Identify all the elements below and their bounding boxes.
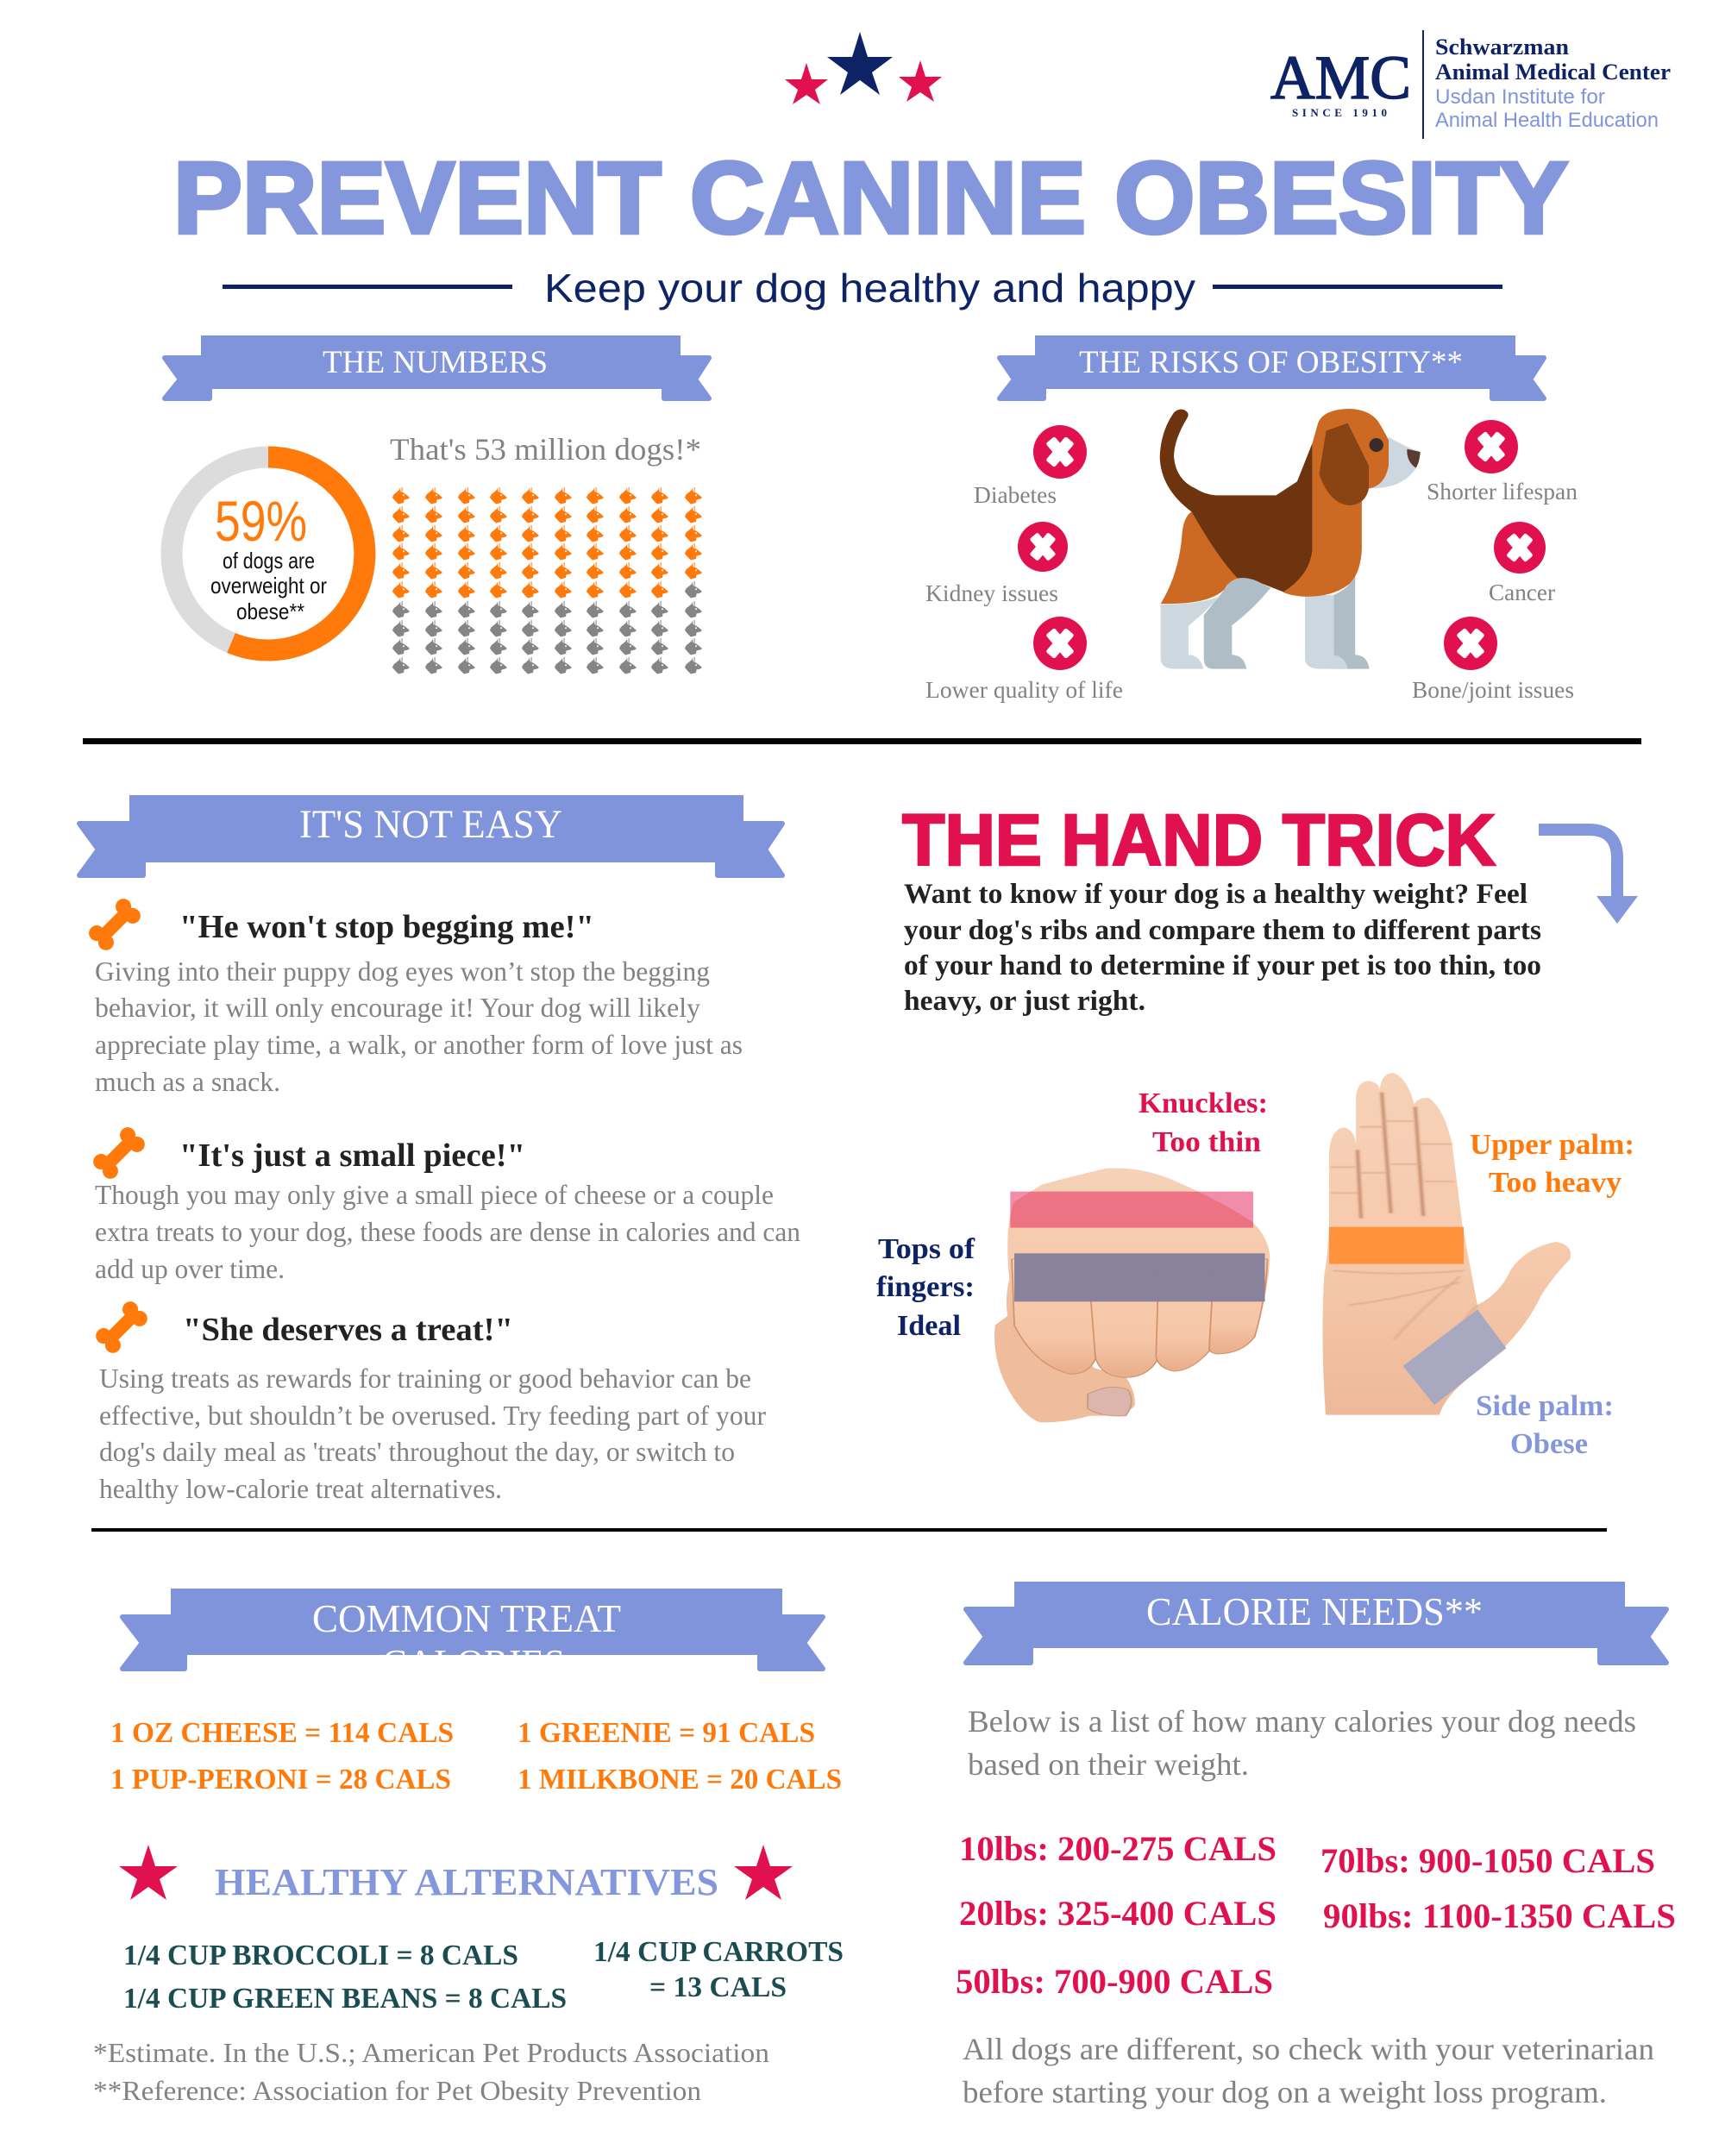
text: vet advice (963, 2032, 1654, 2109)
logo: AMC Schwarzman Animal Medical Center: Animal Medical Center (1435, 60, 1671, 85)
section: she deserves a treat: dog's daily meal as 'treats' throughout the day, or switch to (99, 1436, 735, 1467)
hand labels: Obese (1510, 1428, 1588, 1460)
title: PREVENT CANINE OBESITY (173, 141, 1568, 255)
illustration: open palm with overlays (1322, 1073, 1571, 1415)
ribbon: it's not easy (79, 795, 782, 875)
hand labels: Knuckles: (1138, 1087, 1268, 1119)
ribbon: common treat calories: CALORIES (382, 1641, 565, 1685)
section: he won't stop begging me: behavior, it will only encourage it! Your dog will likely (95, 992, 700, 1023)
risks: icons and labels: Lower quality of life (925, 677, 1123, 703)
section: it's just a small piece: Though you may only give a small piece of cheese or a couple (95, 1179, 774, 1210)
calorie needs by weight (956, 1829, 1676, 2001)
risks: icons and labels: Bone/joint issues (1412, 677, 1574, 703)
text: calorie needs intro (968, 1704, 1636, 1782)
section: he won't stop begging me: Giving into their puppy dog eyes won’t stop the begging (95, 956, 710, 987)
risks: icons and labels: Kidney issues (925, 580, 1058, 606)
hand labels: Too thin (1152, 1126, 1261, 1158)
calorie needs by weight: 90lbs: 1100-1350 CALS (1323, 1896, 1676, 1935)
footnotes: **Reference: Association for Pet Obesity Prevention (93, 2075, 701, 2106)
logo: AMC Schwarzman Animal Medical Center: Schwarzman (1435, 34, 1570, 60)
illustration: fist with overlays (994, 1168, 1270, 1422)
ribbon: it's not easy: IT'S NOT EASY (299, 802, 562, 847)
arrow (1539, 830, 1638, 924)
alternatives list: 1/4 CUP BROCCOLI = 8 CALS (123, 1940, 518, 1971)
alternatives list (123, 1936, 844, 2015)
hand labels: Too heavy (1489, 1167, 1622, 1199)
text: calorie needs intro: based on their weight. (968, 1747, 1249, 1782)
footnotes: *Estimate. In the U.S.; American Pet Products Association (93, 2037, 769, 2068)
logo: AMC Schwarzman Animal Medical Center: AMC (1270, 43, 1411, 112)
section: she deserves a treat: "She deserves a treat!" (183, 1312, 513, 1348)
ribbon: calorie needs: CALORIE NEEDS** (1146, 1589, 1483, 1633)
ribbon: the risks of obesity (1000, 335, 1544, 398)
hand labels: fingers: (876, 1271, 975, 1303)
section: it's just a small piece: add up over time. (95, 1253, 285, 1284)
heading: the hand trick: THE HAND TRICK (902, 799, 1496, 881)
text: vet advice: All dogs are different, so check with your veterinarian (963, 2032, 1654, 2066)
ribbon: common treat calories: COMMON TREAT (312, 1596, 621, 1640)
donut chart: 59 percent: obese** (236, 599, 304, 624)
subtitle with rules (223, 266, 1502, 310)
hand labels: Ideal (897, 1310, 961, 1342)
footnotes (93, 2037, 769, 2106)
alternatives list: 1/4 CUP CARROTS (593, 1936, 844, 1968)
divider (91, 1528, 1607, 1532)
text: hand trick intro: Want to know if your dog is a healthy weight? Feel (904, 879, 1527, 910)
dog icon grid (392, 487, 702, 674)
risks: icons and labels: Diabetes (974, 482, 1057, 508)
ribbon: the risks of obesity: THE RISKS OF OBESITY** (1079, 345, 1463, 380)
risks: icons and labels: Shorter lifespan (1427, 479, 1578, 505)
treat calorie list (110, 1717, 842, 1796)
treat calorie list: 1 OZ CHEESE = 114 CALS (110, 1717, 454, 1749)
logo: AMC Schwarzman Animal Medical Center: Animal Health Education (1435, 109, 1659, 132)
hand labels (876, 1087, 1634, 1460)
risks: icons and labels (925, 420, 1578, 703)
section: she deserves a treat: effective, but shouldn’t be overused. Try feeding part of your (99, 1400, 766, 1431)
treat calorie list: 1 MILKBONE = 20 CALS (518, 1764, 842, 1796)
logo: AMC Schwarzman Animal Medical Center: SINCE 1910 (1292, 106, 1387, 119)
subtitle with rules: Keep your dog healthy and happy (544, 266, 1195, 310)
alternatives list: 1/4 CUP GREEN BEANS = 8 CALS (123, 1983, 567, 2015)
text: that's 53 million dogs: That's 53 million dogs!* (390, 432, 701, 467)
heading: healthy alternatives with stars (119, 1845, 793, 1903)
section: he won't stop begging me (85, 895, 743, 1097)
section: he won't stop begging me: appreciate play time, a walk, or another form of love just as (95, 1029, 743, 1060)
section: it's just a small piece: extra treats to your dog, these foods are dense in calories and can (95, 1216, 800, 1247)
ribbon: the numbers (165, 335, 709, 398)
section: she deserves a treat: Using treats as rewards for training or good behavior can be (99, 1363, 751, 1394)
text: hand trick intro: heavy, or just right. (904, 986, 1145, 1017)
section: he won't stop begging me: "He won't stop begging me!" (179, 909, 594, 945)
icon: three stars (785, 32, 942, 104)
treat calorie list: 1 GREENIE = 91 CALS (518, 1717, 815, 1749)
donut chart: 59 percent (172, 457, 365, 650)
hand labels: Side palm: (1476, 1390, 1614, 1422)
section: it's just a small piece (90, 1124, 800, 1284)
text: calorie needs intro: Below is a list of how many calories your dog needs (968, 1704, 1636, 1739)
ribbon: calorie needs (966, 1582, 1666, 1663)
section: it's just a small piece: "It's just a small piece!" (179, 1138, 525, 1174)
section: she deserves a treat: healthy low-calorie treat alternatives. (99, 1473, 502, 1504)
ribbon: the numbers: THE NUMBERS (323, 345, 548, 380)
logo: AMC Schwarzman Animal Medical Center: Usdan Institute for (1435, 85, 1605, 109)
section: he won't stop begging me: much as a snack. (95, 1066, 280, 1097)
alternatives list: = 13 CALS (649, 1971, 787, 2003)
donut chart: 59 percent: of dogs are (223, 548, 315, 573)
hand labels: Tops of (878, 1233, 975, 1265)
donut chart: 59 percent: overweight or (210, 573, 327, 599)
donut chart: 59 percent: 59% (215, 489, 307, 553)
calorie needs by weight: 50lbs: 700-900 CALS (956, 1962, 1273, 2001)
calorie needs by weight: 20lbs: 325-400 CALS (959, 1894, 1276, 1933)
divider (83, 738, 1641, 744)
text: vet advice: before starting your dog on a weight loss program. (963, 2075, 1607, 2109)
text: hand trick intro: of your hand to determine if your pet is too thin, too (904, 950, 1541, 981)
text: hand trick intro: your dog's ribs and compare them to different parts (904, 915, 1541, 946)
hand labels: Upper palm: (1470, 1129, 1634, 1161)
text: hand trick intro (904, 879, 1541, 1017)
treat calorie list: 1 PUP-PERONI = 28 CALS (110, 1764, 451, 1796)
ribbon: common treat calories (122, 1589, 823, 1685)
calorie needs by weight: 70lbs: 900-1050 CALS (1320, 1841, 1655, 1880)
risks: icons and labels: Cancer (1489, 580, 1555, 605)
logo: AMC Schwarzman Animal Medical Center (1270, 30, 1671, 139)
illustration: beagle dog (1160, 409, 1421, 669)
calorie needs by weight: 10lbs: 200-275 CALS (959, 1829, 1276, 1868)
section: she deserves a treat (92, 1298, 766, 1504)
heading: healthy alternatives with stars: HEALTHY ALTERNATIVES (215, 1861, 718, 1903)
